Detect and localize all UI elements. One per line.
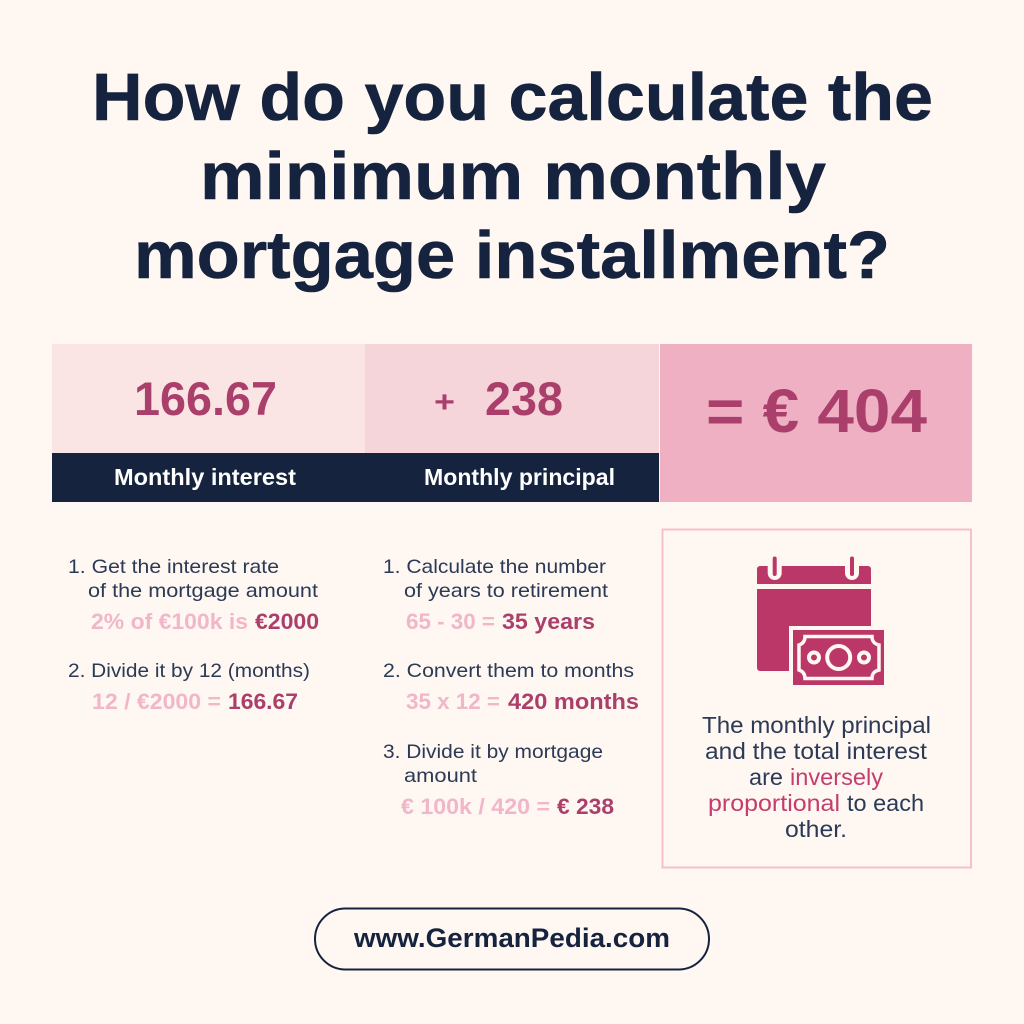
title [92, 60, 933, 293]
text block: monthly interest steps: 2% of €100k is [91, 609, 248, 634]
text block: monthly interest steps [68, 556, 319, 714]
note text: inversely [790, 764, 883, 790]
text block: monthly interest steps: 2. Divide it by 12 (months) [68, 660, 310, 682]
text block: monthly principal steps: € 100k / 420 = [401, 794, 550, 819]
text block: monthly principal steps: of years to retirement [404, 580, 609, 602]
label bar [52, 453, 659, 502]
note text: to each [847, 790, 924, 816]
panel: monthly principal value: + [434, 386, 455, 419]
text block: monthly principal steps [383, 556, 639, 819]
panel: monthly interest value [52, 344, 365, 453]
panel: note box [662, 530, 971, 868]
note text: proportional [708, 790, 840, 816]
note text: The monthly principal [702, 712, 931, 738]
text block: monthly principal steps: 3. Divide it by mortgage [383, 741, 603, 763]
text block: monthly principal steps: 420 months [508, 689, 639, 714]
text block: monthly principal steps: 65 - 30 = [406, 609, 495, 634]
label bar: Monthly interest [114, 464, 296, 490]
text block: monthly interest steps: 1. Get the interest rate [68, 556, 279, 578]
panel: monthly principal value: 238 [485, 372, 563, 425]
website pill [315, 908, 709, 970]
title: mortgage installment? [134, 218, 890, 293]
title: How do you calculate the [92, 60, 933, 135]
text block: monthly interest steps: of the mortgage amount [88, 580, 319, 602]
website pill: www.GermanPedia.com [353, 923, 670, 953]
text block: monthly interest steps: 166.67 [228, 689, 298, 714]
label bar: Monthly principal [424, 464, 615, 490]
panel: monthly interest value: 166.67 [134, 372, 277, 425]
title: minimum monthly [200, 139, 826, 214]
text block: monthly principal steps: 35 x 12 = [406, 689, 500, 714]
text block: monthly principal steps: 2. Convert them to months [383, 660, 634, 682]
note text: other. [785, 816, 847, 842]
panel: total result: = € 404 [706, 377, 927, 445]
text block: monthly principal steps: amount [404, 765, 478, 787]
text block: monthly principal steps: € 238 [557, 794, 614, 819]
text block: monthly interest steps: €2000 [255, 609, 319, 634]
note text: are [749, 764, 783, 790]
panel: monthly principal value [365, 344, 659, 453]
icon: calendar with banknote [757, 558, 884, 685]
note text [702, 712, 931, 842]
panel: total result [660, 344, 972, 502]
text block: monthly principal steps: 1. Calculate the number [383, 556, 607, 578]
text block: monthly interest steps: 12 / €2000 = [92, 689, 221, 714]
note text: and the total interest [705, 738, 927, 764]
text block: monthly principal steps: 35 years [502, 609, 595, 634]
